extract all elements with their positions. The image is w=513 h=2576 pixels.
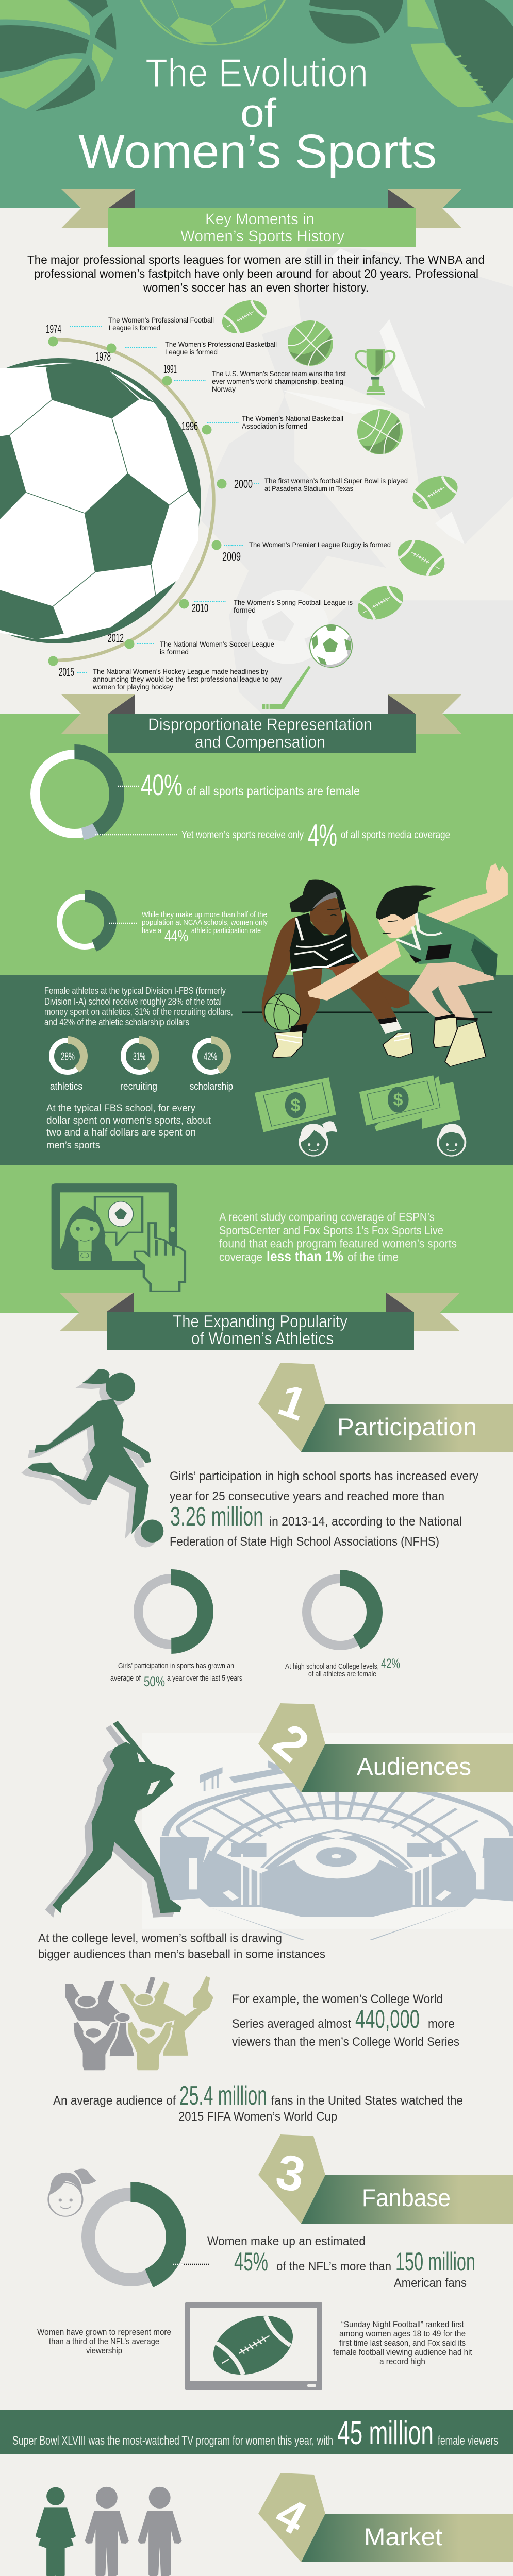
text: 50 percent caption: average of xyxy=(110,1674,141,1683)
header: fanbase: Fanbase xyxy=(362,2184,451,2211)
icon: women's dollar xyxy=(255,1077,336,1132)
icon: basketball 1978 xyxy=(288,320,333,366)
soccer kicker watermark xyxy=(201,248,513,714)
donut: scholarship 42 percent xyxy=(190,1040,233,1092)
intro paragraph: The major professional sports leagues for women are still in their infancy. The WNBA and xyxy=(27,253,485,266)
text: participation paragraph: year for 25 consecutive years and reached more than xyxy=(170,1489,444,1503)
icon: grey girl face xyxy=(48,2168,96,2216)
timeline event text: The Women’s Spring Football League is xyxy=(234,599,353,606)
timeline event text: announcing they would be the first professional league to pay xyxy=(93,675,282,683)
text: world cup audience: 25.4 million xyxy=(179,2081,267,2111)
text: dollars comparison: men’s sports xyxy=(46,1140,100,1151)
text: participation paragraph: Federation of State High School Associations (NFHS) xyxy=(170,1535,439,1549)
intro paragraph: professional women’s fastpitch have only been around for about 20 years. Professional xyxy=(34,267,478,280)
icon: boy face xyxy=(438,1124,465,1156)
text: 42 percent caption: of all athletes are female xyxy=(308,1670,376,1679)
icon: men's dollars xyxy=(359,1075,460,1131)
text: participation paragraph xyxy=(170,1469,478,1549)
section: disproportionate background xyxy=(0,714,513,975)
text: world series: viewers than the men’s College World Series xyxy=(232,2035,459,2049)
icon: trophy xyxy=(356,349,394,395)
donut: recruiting 31 percent xyxy=(120,1040,157,1092)
header: participation: 1 xyxy=(272,1374,313,1430)
donut: 45 percent fans xyxy=(86,2192,210,2282)
text: sunday night football: a record high xyxy=(379,2357,425,2366)
text: media coverage study: coverage xyxy=(219,1250,262,1263)
band: super bowl stat xyxy=(0,2410,513,2454)
timeline years: 1974 xyxy=(46,322,61,335)
text: 50 percent caption: Girls’ participation in sports has grown an xyxy=(118,1662,234,1670)
stat: 4 percent xyxy=(95,818,450,853)
text: scholarship spending: and 42% of the athletic scholarship dollars xyxy=(44,1017,189,1027)
timeline event text: The Women’s Professional Football xyxy=(108,316,214,324)
text: dollars comparison: two and a half dollars are spent on xyxy=(46,1127,196,1138)
timeline event text: Norway xyxy=(212,385,236,393)
text: world cup audience: An average audience of xyxy=(53,2094,176,2108)
donut: 42 percent athletes xyxy=(306,1578,374,1647)
icon: small soccer ball xyxy=(310,625,352,667)
timeline event text: at Pasadena Stadium in Texas xyxy=(264,485,353,493)
text: NFL viewership: Women have grown to represent more xyxy=(37,2327,171,2337)
ribbon: expanding popularity: The Expanding Popularity xyxy=(173,1312,347,1331)
stat: 4 percent: of all sports media coverage xyxy=(341,829,450,841)
text: scholarship spending: Female athletes at the typical Division I-FBS (formerly xyxy=(44,986,226,996)
donut: 50 percent growth xyxy=(137,1578,205,1646)
text: participation paragraph: Girls’ participation in high school sports has increased every xyxy=(170,1469,478,1483)
icon: cheering crowd xyxy=(65,1976,213,2071)
timeline years xyxy=(46,322,253,679)
text: NFL viewership xyxy=(37,2327,171,2355)
icon: football 1974 xyxy=(214,294,274,340)
stat: 44 percent text: have a xyxy=(142,927,162,935)
stat: 44 percent text xyxy=(109,911,268,945)
text: 42 percent caption: 42% xyxy=(381,1656,400,1671)
title: The Evolution xyxy=(145,51,368,95)
donut: recruiting 31 percent: recruiting xyxy=(120,1081,157,1092)
player A limbs xyxy=(262,897,410,1029)
text: sunday night football: among women ages 18 to 49 for the xyxy=(339,2329,466,2338)
timeline event text: women for playing hockey xyxy=(92,683,173,691)
stat: 40 percent xyxy=(118,769,360,802)
timeline big soccer ball xyxy=(0,358,201,643)
ribbon: key moments xyxy=(61,189,461,247)
ribbon: key moments: Key Moments in xyxy=(205,211,315,228)
icon: three people xyxy=(36,2487,182,2576)
text: softball audiences xyxy=(38,1931,325,1961)
text: participation paragraph: 3.26 million xyxy=(170,1502,263,1532)
ball xyxy=(264,994,301,1030)
stat: 40 percent: of all sports participants are female xyxy=(187,784,360,799)
timeline arc xyxy=(53,340,214,660)
stat: 4 percent: 4% xyxy=(308,818,337,853)
donut: scholarship 42 percent: 42% xyxy=(204,1050,217,1063)
timeline years: 2012 xyxy=(108,631,124,645)
timeline years: 2009 xyxy=(222,550,241,563)
timeline event text: League is formed xyxy=(109,324,160,332)
band: super bowl stat: 45 million xyxy=(337,2414,434,2451)
ribbon: key moments: Women’s Sports History xyxy=(180,228,344,245)
ribbon: disproportionate representation: Disproportionate Representation xyxy=(148,715,372,734)
timeline years: 2015 xyxy=(59,665,74,679)
intro paragraph: women’s soccer has an even shorter history. xyxy=(143,281,369,294)
header: participation: Participation xyxy=(337,1413,477,1440)
header: fanbase: 3 xyxy=(271,2144,310,2203)
title: of xyxy=(240,90,276,135)
text: sunday night football: female football viewing audience had hit xyxy=(333,2347,472,2357)
icon: women's dollar: $ xyxy=(291,1096,301,1115)
icon: rugby ball 2009 xyxy=(390,533,453,583)
timeline event text: The Women’s Premier League Rugby is formed xyxy=(249,541,391,549)
text: world cup audience: fans in the United States watched the xyxy=(271,2094,463,2108)
text: 50 percent caption: a year over the last 5 years xyxy=(167,1674,242,1683)
ribbon: expanding popularity xyxy=(60,1293,460,1350)
header: participation xyxy=(258,1363,513,1452)
donut: athletics 28 percent xyxy=(50,1040,84,1092)
icon: football 2010 xyxy=(350,579,411,626)
timeline years: 1996 xyxy=(181,419,198,433)
text: 50 percent caption xyxy=(110,1662,242,1689)
text: media coverage study xyxy=(219,1210,457,1264)
icon: men's dollars: $ xyxy=(393,1090,403,1110)
timeline event text: is formed xyxy=(160,648,189,656)
icon: soccer player silhouette xyxy=(21,1369,163,1547)
text: sunday night football: first time last season, and Fox said its xyxy=(339,2338,466,2348)
icon: basketball 1996 xyxy=(352,404,408,460)
timeline event text: The National Women’s Soccer League xyxy=(160,640,274,648)
text: media coverage study: less than 1% xyxy=(267,1249,343,1264)
stat: 44 percent text: athletic participation rate xyxy=(191,927,261,935)
text: NFL fans: 45% xyxy=(234,2247,268,2276)
text: scholarship spending: money spent on athletics, 31% of the recruiting dollars, xyxy=(44,1007,233,1017)
text: world series: For example, the women’s College World xyxy=(232,1992,443,2006)
title: Women’s Sports xyxy=(78,125,437,178)
donut: recruiting 31 percent: 31% xyxy=(133,1050,145,1063)
section: dark compensation background xyxy=(0,975,513,1165)
stat: 44 percent text: population at NCAA schools, women only xyxy=(142,919,268,927)
icon: header basketball xyxy=(0,0,116,111)
shoes A xyxy=(290,1024,308,1033)
text: scholarship spending xyxy=(44,986,233,1027)
text: 50 percent caption: 50% xyxy=(144,1674,165,1689)
header: market xyxy=(258,2473,513,2562)
timeline event text: League is formed xyxy=(165,348,218,356)
timeline event text: The U.S. Women’s Soccer team wins the first xyxy=(212,370,346,378)
donut: scholarship 42 percent: scholarship xyxy=(190,1081,233,1092)
text: world series: more xyxy=(428,2017,455,2031)
text: NFL fans: of the NFL’s more than xyxy=(276,2260,391,2274)
stat: 40 percent: 40% xyxy=(141,769,183,802)
timeline years: 1978 xyxy=(95,350,111,363)
icon: header dark ball xyxy=(309,0,403,44)
icon: tv with football xyxy=(185,2302,322,2390)
band: super bowl stat: Super Bowl XLVIII was the most-watched TV program for women this year, with xyxy=(12,2434,333,2448)
text: dollars comparison: At the typical FBS school, for every xyxy=(46,1103,195,1114)
ribbon: disproportionate representation: and Compensation xyxy=(195,733,325,751)
text: world cup audience: 2015 FIFA Women’s World Cup xyxy=(178,2110,337,2124)
icon: header soccer ball xyxy=(141,0,285,45)
timeline event text: The first women’s football Super Bowl is played xyxy=(264,477,408,485)
icon: football 2000 xyxy=(405,469,466,516)
header: market: Market xyxy=(364,2523,442,2550)
timeline years: 2010 xyxy=(192,601,208,615)
text: world cup audience xyxy=(53,2081,463,2124)
timeline dots and connectors xyxy=(48,327,259,672)
icon: tablet with reporter xyxy=(52,1183,185,1291)
text: scholarship spending: Division I-A) school receive roughly 28% of the total xyxy=(44,996,222,1007)
text: NFL fans xyxy=(207,2234,475,2290)
timeline event text: formed xyxy=(234,606,256,614)
title xyxy=(78,51,437,178)
icon: girl face xyxy=(300,1121,337,1156)
text: 42 percent caption xyxy=(285,1656,400,1679)
header: audiences: 2 xyxy=(263,1714,319,1773)
header: audiences: Audiences xyxy=(357,1753,471,1780)
text: world series: 440,000 xyxy=(355,2005,420,2033)
stat: 44 percent text: 44% xyxy=(164,927,188,945)
text: NFL fans: Women make up an estimated xyxy=(207,2234,366,2248)
ribbon: disproportionate representation xyxy=(61,694,461,753)
intro paragraph xyxy=(27,253,485,294)
header: fanbase xyxy=(258,2134,513,2224)
ribbon: expanding popularity: of Women’s Athletics xyxy=(191,1329,334,1348)
donut: 44 percent xyxy=(59,896,110,947)
timeline years: 1991 xyxy=(163,362,177,376)
icon: hockey stick xyxy=(262,666,311,709)
stat: 4 percent: Yet women’s sports receive only xyxy=(181,829,304,841)
player B limbs xyxy=(308,863,508,1001)
timeline event text: Association is formed xyxy=(242,422,307,430)
text: media coverage study: SportsCenter and Fox Sports 1’s Fox Sports Live xyxy=(219,1224,443,1237)
icon: batter silhouette xyxy=(45,1721,181,1918)
donut: athletics 28 percent: athletics xyxy=(50,1081,82,1092)
text: world series: Series averaged almost xyxy=(232,2017,351,2031)
timeline event text xyxy=(92,316,408,691)
text: world series xyxy=(232,1992,459,2049)
timeline event text: The National Women’s Hockey League made headlines by xyxy=(93,668,268,675)
illustration: stadium xyxy=(142,1733,513,1940)
timeline years: 2000 xyxy=(234,477,253,490)
text: media coverage study: found that each program featured women’s sports xyxy=(219,1236,457,1250)
text: NFL viewership: viewership xyxy=(86,2346,122,2355)
donut: 40 percent and 4 percent xyxy=(33,752,117,836)
illustration: basketball players xyxy=(242,863,508,1066)
text: softball audiences: At the college level, women’s softball is drawing xyxy=(38,1931,282,1945)
header band xyxy=(0,0,513,208)
timeline event text: The Women’s National Basketball xyxy=(242,415,343,422)
icon: header football xyxy=(407,0,513,123)
text: media coverage study: of the time xyxy=(347,1250,399,1263)
text: NFL fans: American fans xyxy=(394,2276,467,2290)
timeline event text: ever women’s world championship, beating xyxy=(212,378,343,385)
donut: athletics 28 percent: 28% xyxy=(61,1050,75,1063)
text: dollars comparison: dollar spent on women’s sports, about xyxy=(46,1115,211,1126)
text: sunday night football: “Sunday Night Football” ranked first xyxy=(341,2319,464,2329)
section: media coverage background xyxy=(0,1165,513,1313)
timeline event text: The Women’s Professional Basketball xyxy=(165,341,277,348)
header: audiences xyxy=(258,1703,513,1792)
text: dollars comparison xyxy=(46,1103,211,1151)
text: softball audiences: bigger audiences than men’s baseball in some instances xyxy=(38,1947,325,1961)
text: 42 percent caption: At high school and College levels, xyxy=(285,1662,379,1671)
text: sunday night football xyxy=(333,2319,472,2366)
stat: 44 percent text: While they make up more than half of the xyxy=(142,911,267,919)
text: NFL viewership: than a third of the NFL’s average xyxy=(49,2336,159,2346)
header: market: 4 xyxy=(267,2487,315,2545)
text: media coverage study: A recent study comparing coverage of ESPN’s xyxy=(219,1210,435,1224)
text: participation paragraph: in 2013-14, according to the National xyxy=(269,1515,462,1529)
